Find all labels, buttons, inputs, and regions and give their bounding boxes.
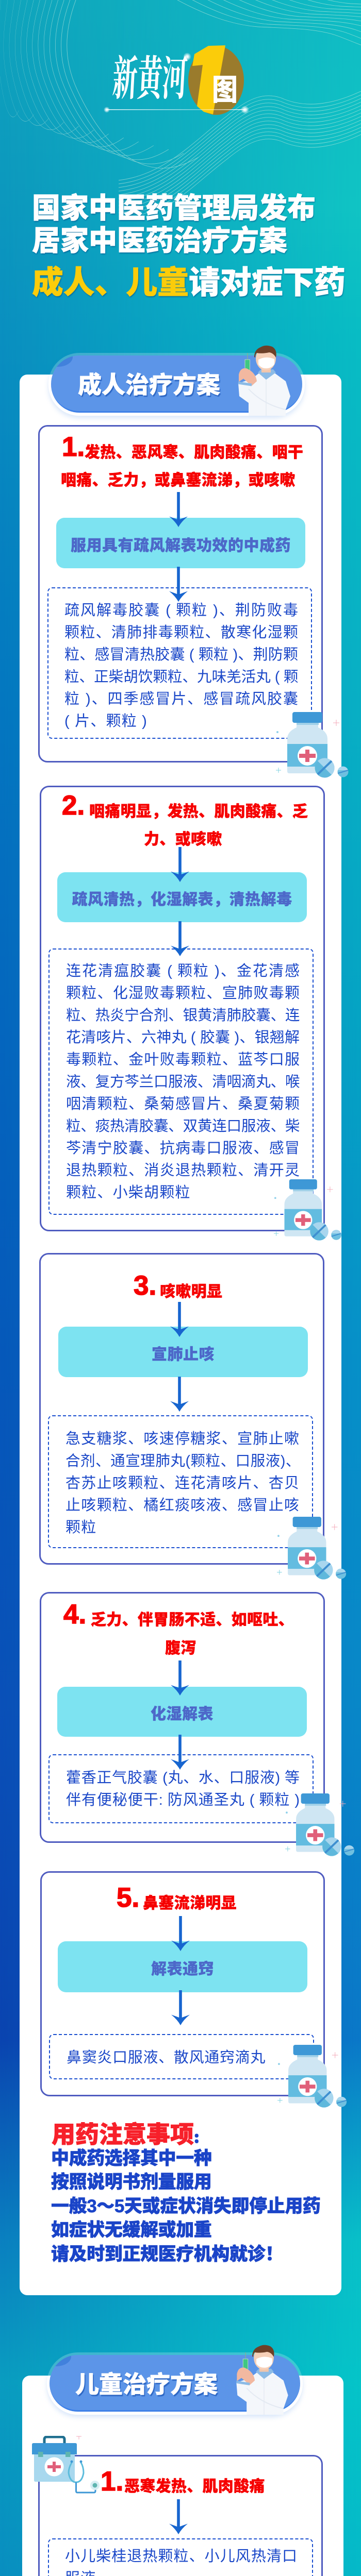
heading text: 儿童治疗方案 — [75, 2366, 218, 2400]
icon: gold 1 badge — [104, 45, 249, 115]
icon: first aid kit and stethoscope — [32, 2436, 102, 2495]
medicine list: 颗粒、清肺排毒颗粒、散寒化湿颗 — [64, 624, 298, 641]
arrow — [171, 1660, 189, 1696]
medicine list: 粒 )、四季感冒片、感冒疏风胶囊 — [64, 691, 298, 707]
treatment principle — [58, 1941, 307, 1992]
arrow — [169, 567, 188, 602]
symptoms heading — [61, 432, 303, 490]
symptoms heading: 咳嗽明显 — [160, 1279, 222, 1301]
card 3: cough — [39, 1253, 324, 1565]
arrow — [169, 2499, 188, 2534]
medicine list: 小儿柴桂退热颗粒、小儿风热清口 — [65, 2548, 297, 2565]
medicine list: 藿香正气胶囊 (丸、水、口服液) 等 — [66, 1770, 300, 1786]
icon: medicine bottle — [277, 1517, 347, 1580]
symptoms heading: 鼻塞流涕明显 — [143, 1890, 237, 1913]
symptoms heading: 4. — [63, 1599, 86, 1630]
arrow — [171, 921, 189, 956]
heading text: 成人治疗方案 — [78, 366, 220, 400]
symptoms heading — [62, 790, 308, 849]
medicine list: 颗粒 — [65, 1519, 96, 1536]
symptoms heading: 1. — [62, 432, 85, 462]
medicine list: 急支糖浆、咳速停糖浆、宣肺止嗽 — [65, 1431, 299, 1447]
treatment principle: 化湿解表 — [151, 1701, 214, 1724]
icon: medicine bottle — [277, 2045, 347, 2108]
card 4: fatigue with stomach upset — [40, 1592, 325, 1843]
treatment principle — [57, 872, 307, 922]
panel: children plan — [22, 2376, 343, 2576]
icon: medicine bottle — [285, 1793, 355, 1856]
arrow — [171, 1735, 189, 1770]
icon: doctor with syringe — [238, 345, 290, 416]
notes text: 如症状无缓解或加重 — [51, 2220, 211, 2240]
symptoms heading — [63, 1599, 294, 1658]
treatment principle: 疏风清热，化湿解表，清热解毒 — [72, 887, 292, 909]
medicine list: 疏风解毒胶囊 ( 颗粒 )、荆防败毒 — [64, 602, 298, 619]
medicine list: 退热颗粒、消炎退热颗粒、清开灵 — [66, 1162, 300, 1179]
medicine list: 伴有便秘便干: 防风通圣丸 ( 颗粒 ) — [66, 1792, 300, 1808]
treatment principle: 服用具有疏风解表功效的中成药 — [71, 533, 291, 555]
symptoms heading: 恶寒发热、肌肉酸痛 — [124, 2473, 265, 2496]
icon: medicine bottle — [276, 712, 349, 778]
medicine list: ( 片、颗粒 ) — [64, 713, 147, 730]
child card 1 — [38, 2455, 323, 2576]
logo: 新黄河 1图 — [104, 41, 249, 115]
treatment principle: 解表通窍 — [151, 1956, 214, 1979]
medicine list — [48, 1754, 314, 1823]
arrow — [171, 1990, 190, 2025]
medicine list: 花清咳片、六神丸 ( 胶囊 )、银翘解 — [66, 1029, 300, 1046]
medicine list: 连花清瘟胶囊 ( 颗粒 )、金花清感 — [66, 963, 300, 979]
card 2: sore throat — [40, 786, 325, 1231]
logo calligraphy: 新黄河 — [111, 41, 189, 109]
arrow — [171, 847, 189, 882]
medicine list — [48, 1415, 313, 1548]
medicine list: 咽清颗粒、桑菊感冒片、桑夏菊颗 — [66, 1096, 300, 1112]
symptoms heading — [101, 2466, 265, 2497]
symptoms heading: 1. — [101, 2466, 123, 2497]
icon: doctor with syringe — [236, 2345, 288, 2415]
arrow — [170, 1377, 189, 1412]
medicine list — [48, 948, 314, 1215]
medicine list: 止咳颗粒、橘红痰咳液、感冒止咳 — [65, 1497, 299, 1514]
medicine list: 毒颗粒、金叶败毒颗粒、蓝芩口服 — [66, 1052, 300, 1068]
logo character 图: 图 — [212, 66, 238, 109]
medicine list: 液、复方芩兰口服液、清咽滴丸、喉 — [66, 1074, 300, 1090]
notes heading: 用药注意事项: — [52, 2116, 200, 2150]
card 1: fever and chills — [38, 425, 323, 762]
treatment principle — [58, 1327, 308, 1377]
symptoms heading: 力、或咳嗽 — [144, 826, 222, 849]
medicine list: 合剂、通宣理肺丸(颗粒、口服液)、 — [65, 1453, 300, 1469]
symptoms heading: 咽痛、乏力，或鼻塞流涕，或咳嗽 — [61, 467, 295, 490]
medicine list — [47, 587, 312, 739]
treatment principle — [57, 1687, 307, 1737]
medicine list: 芩清宁胶囊、抗病毒口服液、感冒 — [66, 1140, 300, 1157]
title line 3: 成人、儿童请对症下药 — [32, 257, 346, 302]
card 5: nasal congestion — [40, 1871, 325, 2096]
medicine list: 颗粒、小柴胡颗粒 — [66, 1184, 191, 1201]
heading: adult treatment plan pill — [47, 345, 306, 420]
icon: medicine bottle — [274, 1179, 341, 1241]
medicine list — [48, 2538, 313, 2576]
medicine list: 粒、痰热清胶囊、双黄连口服液、柴 — [66, 1118, 300, 1134]
notes text: 按照说明书剂量服用 — [51, 2172, 211, 2192]
symptoms heading: 乏力、伴胃肠不适、如呕吐、 — [91, 1607, 294, 1630]
symptoms heading: 发热、恶风寒、肌肉酸痛、咽干 — [85, 439, 303, 462]
medicine list — [49, 2034, 314, 2079]
symptoms heading: 2. — [62, 790, 85, 821]
title — [32, 185, 346, 302]
arrow — [171, 1916, 190, 1951]
notes text — [51, 2148, 321, 2264]
panel: adult plan — [20, 375, 341, 2295]
arrow — [170, 1302, 189, 1337]
medicine list: 颗粒、化湿败毒颗粒、宣肺败毒颗 — [66, 985, 300, 1002]
medicine list: 鼻窦炎口服液、散风通窍滴丸 — [67, 2049, 266, 2066]
title line 2: 居家中医药治疗方案 — [32, 217, 287, 259]
medicine list: 粒、热炎宁合剂、银黄清肺胶囊、连 — [66, 1007, 300, 1024]
heading: children treatment plan pill — [45, 2345, 304, 2419]
symptoms heading — [117, 1883, 237, 1913]
symptoms heading: 3. — [134, 1270, 156, 1301]
adult medication notes — [51, 2116, 321, 2264]
arrow — [169, 492, 188, 527]
medicine list: 粒、正柴胡饮颗粒、九味羌活丸 ( 颗 — [64, 669, 298, 685]
symptoms heading — [134, 1270, 222, 1301]
title line 1: 国家中医药管理局发布 — [32, 185, 316, 226]
medicine list: 粒、感冒清热胶囊 ( 颗粒 )、荆防颗 — [64, 647, 298, 663]
decorative wave lines — [0, 0, 361, 216]
medicine list: 杏苏止咳颗粒、连花清咳片、杏贝 — [65, 1475, 299, 1492]
symptoms heading: 腹泻 — [165, 1635, 196, 1658]
notes text: 中成药选择其中一种 — [51, 2148, 211, 2168]
symptoms heading: 咽痛明显，发热、肌肉酸痛、乏 — [89, 799, 308, 821]
treatment principle — [56, 518, 305, 568]
symptoms heading: 5. — [117, 1883, 139, 1913]
notes text: 请及时到正规医疗机构就诊！ — [51, 2244, 283, 2264]
treatment principle: 宣肺止咳 — [152, 1342, 215, 1364]
notes text: 一般3～5天或症状消失即停止用药 — [51, 2196, 321, 2216]
